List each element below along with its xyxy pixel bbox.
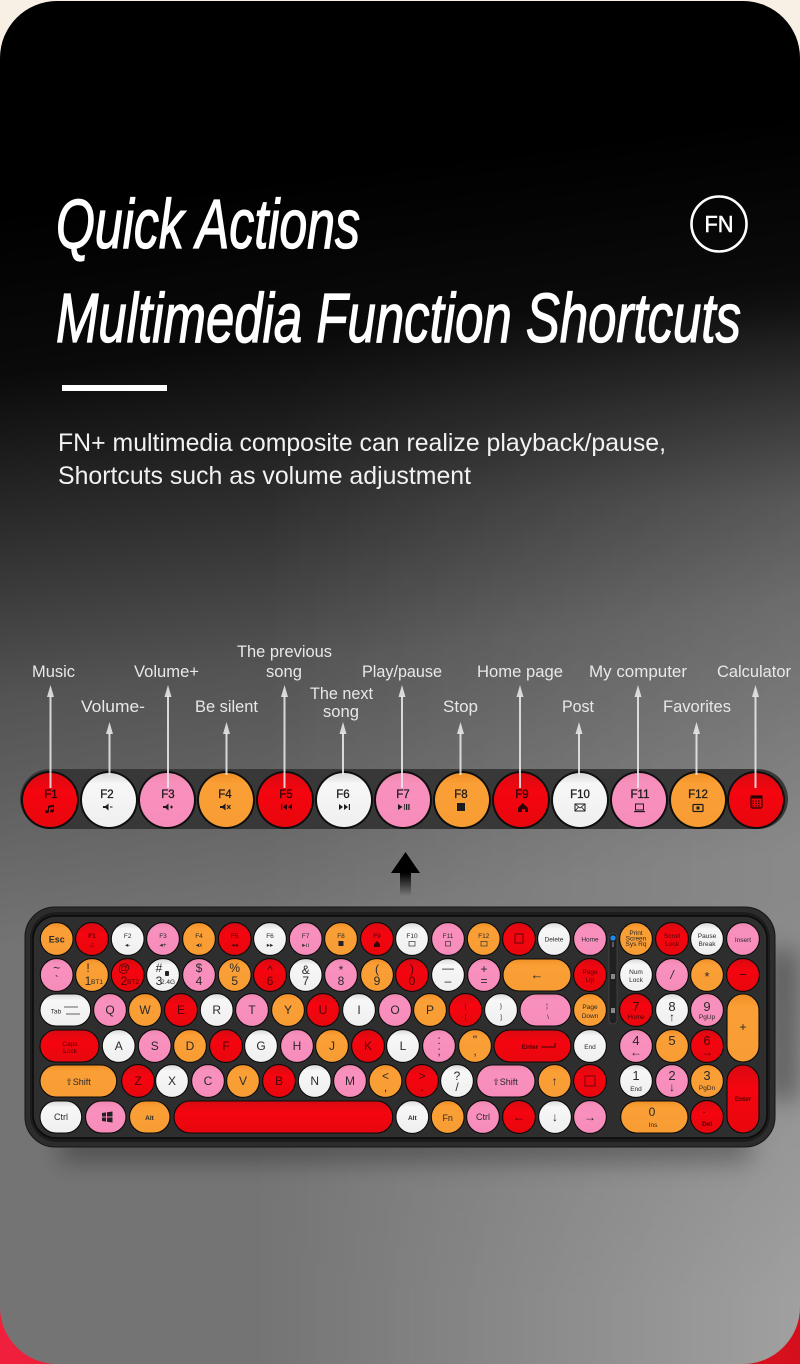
arrow: Volume+ (164, 685, 172, 788)
keyboard row 1 (40, 923, 759, 955)
key F2: F2 (100, 789, 114, 801)
keyboard row 6: 0 (649, 1105, 656, 1119)
panel: function key row (20, 769, 788, 829)
keyboard row 6: Del (702, 1121, 712, 1128)
keyboard row 3: Home (627, 1014, 645, 1021)
arrow: Volume- (106, 722, 113, 775)
keyboard row 5: ⇧Shift (492, 1077, 518, 1087)
keyboard row 3: { (464, 1003, 467, 1010)
arrow: Home page (516, 685, 524, 788)
keyboard frame (25, 907, 775, 1147)
keyboard row 4: 5 (668, 1033, 676, 1048)
keyboard row 5: Enter (735, 1096, 752, 1103)
arrows and labels (32, 642, 791, 788)
keyboard row 5: B (275, 1074, 283, 1088)
keyboard row 2: $ (196, 961, 203, 975)
keyboard row 1: Scroll (664, 933, 681, 940)
keyboard row 2: 2.4G (161, 979, 175, 986)
keyboard row 4: L (400, 1039, 407, 1053)
keyboard row 6: Ctrl (476, 1112, 490, 1122)
arrow: Be silent (223, 722, 230, 775)
keyboard row 1: F5 (231, 933, 239, 940)
keyboard row 6: Ins (649, 1122, 658, 1129)
keyboard row 6 (40, 1101, 723, 1133)
keyboard row 3: O (390, 1003, 400, 1017)
keyboard row 5: X (168, 1074, 176, 1088)
label: Music: Music (32, 662, 75, 681)
keyboard row 2: 1 (85, 974, 92, 988)
description text: FN+ multimedia composite can realize playback/pause, (58, 429, 666, 457)
key F6 (315, 771, 373, 829)
keyboard row 4: 6 (703, 1033, 711, 1048)
keyboard row 3: Page (582, 1004, 598, 1011)
key F9: F9 (515, 789, 529, 801)
keyboard row 1: F2 (124, 933, 132, 940)
keyboard row 5: ? (454, 1069, 461, 1083)
keyboard row 2: 9 (374, 974, 381, 988)
keyboard row 1: F8 (337, 933, 345, 940)
title (56, 185, 741, 357)
key F12: F12 (688, 789, 708, 801)
keyboard row 2: * (704, 969, 710, 984)
keyboard row 4: → (701, 1045, 713, 1059)
keyboard row 1: F11 (443, 933, 454, 940)
keyboard row 2: & (302, 963, 310, 977)
key F11: F11 (631, 789, 649, 801)
keyboard row 4: A (115, 1039, 123, 1053)
keyboard row 6: . (702, 1102, 706, 1116)
label: Play/pause: Play/pause (362, 662, 442, 681)
key F4: F4 (218, 789, 232, 801)
keyboard row 4: D (186, 1039, 195, 1053)
keyboard row 3: I (357, 1003, 361, 1017)
keyboard row 3: + (739, 1020, 747, 1034)
arrow: Calculator (752, 685, 759, 788)
keyboard row 6: Fn (442, 1113, 453, 1123)
keyboard row 5: V (239, 1074, 247, 1088)
description text: Shortcuts such as volume adjustment (58, 462, 471, 490)
keyboard row 3: 7 (632, 999, 640, 1014)
keyboard row 5: 2 (668, 1068, 676, 1083)
arrow: Play/pause (398, 685, 406, 788)
keyboard row 3: ↑ (669, 1010, 675, 1024)
keyboard row 4: End (584, 1044, 596, 1051)
keyboard row 1: ◂◂ (231, 942, 239, 949)
keyboard row 4: ; (437, 1044, 441, 1058)
keyboard row 3: W (139, 1003, 151, 1017)
key F1: F1 (44, 789, 58, 801)
keyboard row 3: ] (500, 1014, 502, 1021)
description text (58, 429, 666, 490)
keyboard row 2: # (156, 961, 163, 975)
keyboard row 6: Alt (145, 1115, 155, 1122)
keyboard row 1: Delete (545, 936, 564, 944)
keyboard row 3: P (426, 1003, 434, 1017)
keyboard row 1: Esc (49, 934, 65, 944)
title: Quick Actions (56, 185, 360, 263)
keyboard row 4: 4 (632, 1033, 640, 1048)
label: Favorites: Favorites (663, 697, 731, 716)
keyboard row 2: 3 (156, 974, 163, 988)
label: Volume-: Volume- (81, 697, 145, 716)
keyboard row 6: Alt (408, 1115, 417, 1122)
keyboard row 3: Q (105, 1003, 115, 1017)
keyboard row 5: > (418, 1069, 426, 1083)
keyboard row 3: E (177, 1003, 185, 1017)
keyboard row 2: 2 (121, 974, 128, 988)
arrow: Favorites (693, 722, 700, 775)
indicator lights (609, 933, 617, 1024)
keyboard row 5: PgDn (699, 1085, 716, 1092)
keyboard row 5: / (455, 1080, 459, 1094)
keyboard row 4: ← (630, 1045, 642, 1059)
arrow: Post (576, 722, 582, 775)
key F2 (80, 771, 138, 829)
keyboard row 1: Sys Rq (626, 941, 647, 948)
label: Post: Post (562, 697, 594, 716)
keyboard row 2: 6 (267, 974, 274, 988)
key F6: F6 (336, 789, 350, 801)
key F9 (492, 771, 550, 829)
key F4 (197, 771, 255, 829)
keyboard row 2: ) (410, 962, 414, 976)
keyboard row 4 (40, 1030, 723, 1062)
label: The next song: The next (310, 684, 373, 703)
keyboard row 5: M (345, 1074, 355, 1088)
key F10 (551, 771, 609, 829)
keyboard row 4: S (151, 1039, 159, 1053)
keyboard row 5: ↑ (552, 1074, 558, 1088)
label: Be silent: Be silent (195, 697, 258, 716)
keyboard row 3: [ (465, 1014, 467, 1021)
keyboard row 2: Up (586, 977, 595, 984)
key F5: F5 (279, 789, 293, 801)
keyboard row 1: F4 (195, 933, 203, 940)
keyboard row 1: Insert (735, 937, 751, 944)
keyboard row 5: , (384, 1080, 387, 1094)
keyboard row 2: @ (118, 961, 130, 975)
icon: FN badge: FN (704, 211, 734, 237)
title underline (62, 385, 167, 391)
keyboard row 2: 7 (302, 974, 309, 988)
keyboard row 1: ▸▸ (267, 942, 274, 949)
keyboard row 1: F1 (88, 933, 96, 940)
keyboard row 4: F (222, 1039, 230, 1053)
keyboard row 4: , (473, 1044, 477, 1058)
arrow: next song (340, 722, 346, 775)
keyboard row 3: Down (582, 1013, 599, 1020)
key F5 (256, 771, 314, 829)
keyboard row 2: BT1 (91, 979, 103, 986)
keyboard row 1: ◂+ (159, 942, 167, 949)
keyboard row 5: End (630, 1086, 642, 1093)
keyboard row 1: ◂- (125, 942, 130, 949)
arrow: My computer (634, 685, 642, 788)
keyboard row 1: ▸ıı (302, 942, 309, 949)
keyboard row 3: ¦ (546, 1003, 548, 1010)
keyboard row 3: Tab (51, 1008, 62, 1016)
keyboard row 4: H (293, 1039, 301, 1053)
keyboard row 2: − (739, 967, 747, 982)
keyboard row 2: 0 (409, 974, 416, 988)
keyboard row 4: : (437, 1033, 441, 1047)
keyboard row 4: J (329, 1039, 335, 1053)
keyboard row 1: Screen (626, 936, 647, 942)
keyboard row 2: ^ (267, 963, 273, 977)
icon: FN badge (692, 196, 746, 252)
keyboard row 4: G (256, 1039, 266, 1053)
keyboard row 1: F10 (406, 933, 418, 940)
keyboard row 5: N (310, 1074, 319, 1088)
keyboard row 2: ` (55, 973, 59, 987)
keyboard row 5: 3 (703, 1068, 711, 1083)
keyboard shadow (60, 950, 798, 1162)
keyboard row 2: / (669, 968, 675, 982)
keyboard row 5: ↓ (669, 1080, 675, 1094)
keyboard row 2: Page (582, 969, 598, 976)
keyboard row 1: Break (699, 941, 716, 948)
keyboard row 1: Home (581, 936, 599, 944)
keyboard row 5 (40, 1065, 759, 1133)
keyboard row 2: = (480, 974, 488, 988)
keyboard row 5: ⇧Shift (65, 1077, 91, 1087)
keyboard row 3 (40, 994, 759, 1062)
keyboard row 6: Ctrl (54, 1112, 68, 1122)
key F8 (433, 771, 491, 829)
keyboard row 5: 1 (632, 1068, 640, 1083)
arrow: Stop (457, 722, 464, 775)
keyboard row 2: ~ (53, 961, 60, 975)
keyboard row 2: — (442, 961, 454, 975)
keyboard row 1: F7 (302, 933, 310, 940)
label: Volume+: Volume+ (134, 662, 199, 681)
arrow: previous song (281, 685, 288, 788)
keyboard row 2: – (445, 974, 452, 988)
label: Stop: Stop (443, 697, 478, 716)
label: The previous song: song (266, 662, 302, 681)
key F7 (374, 771, 432, 829)
keyboard row 1: F3 (159, 933, 167, 940)
keyboard row 6: ← (513, 1110, 525, 1124)
arrow: up arrow pointing to function row (391, 852, 420, 896)
key F11 (610, 771, 668, 829)
keyboard row 2: * (339, 963, 344, 977)
keyboard row 5: . (420, 1080, 424, 1094)
keyboard (25, 907, 775, 1147)
arrow: Music (47, 685, 54, 788)
keyboard row 2: % (229, 961, 240, 975)
key F12 (669, 771, 727, 829)
keyboard row 4: Enter (522, 1044, 539, 1051)
label: The previous song: The previous (237, 642, 332, 661)
keyboard row 4: K (364, 1039, 372, 1053)
keyboard row 1: F12 (478, 933, 490, 940)
keyboard row 5: < (382, 1069, 389, 1083)
keyboard row 2: BT2 (127, 979, 139, 986)
keyboard row 1: Lock (665, 941, 680, 948)
keyboard row 2: ( (375, 962, 379, 976)
keyboard row 3: 9 (703, 999, 711, 1014)
keyboard row 1: Print (629, 930, 643, 937)
keyboard row 3: 8 (668, 999, 676, 1014)
keyboard row 4: Lock (63, 1048, 78, 1055)
label: The next song: song (323, 702, 359, 721)
label: Home page: Home page (477, 662, 563, 681)
keyboard row 4: " (473, 1033, 477, 1047)
keyboard row 1: F9 (373, 933, 381, 940)
keyboard row 3: R (212, 1003, 221, 1017)
label: My computer: My computer (589, 662, 687, 681)
keyboard row 1: F6 (266, 933, 274, 940)
keyboard row 3: U (319, 1003, 327, 1017)
keyboard row 2: 8 (338, 974, 345, 988)
keyboard row 2 (40, 959, 759, 991)
label: Calculator: Calculator (717, 662, 791, 681)
keyboard row 3: \ (547, 1014, 549, 1021)
key F3 (138, 771, 196, 829)
keyboard row 1: Pause (698, 933, 717, 940)
label: The next song (310, 684, 373, 721)
keyboard row 3: PgUp (699, 1014, 716, 1021)
keyboard row 6: → (584, 1110, 596, 1124)
keyboard row 4: Caps (62, 1041, 78, 1048)
key F10: F10 (570, 789, 590, 801)
keyboard row 2: Lock (629, 977, 644, 984)
key F7: F7 (396, 789, 410, 801)
keyboard row 1: ♫ (90, 942, 94, 949)
label: The previous song (237, 642, 332, 681)
key calculator (727, 771, 785, 829)
keyboard row 5: Z (134, 1074, 142, 1088)
keyboard row 1: ◂x (196, 942, 203, 949)
keyboard row 2: ← (530, 967, 544, 982)
keyboard row 3: } (500, 1003, 503, 1010)
keyboard row 2: ! (86, 961, 90, 975)
keyboard row 5: C (204, 1074, 213, 1088)
keyboard row 2: + (480, 962, 488, 976)
keyboard row 2: 5 (231, 974, 238, 988)
key F1 (21, 771, 79, 829)
keyboard row 2: 4 (196, 974, 203, 988)
keyboard row 2: Num (629, 969, 643, 976)
keyboard row 6: ↓ (552, 1110, 558, 1124)
keyboard row 3: T (248, 1003, 256, 1017)
key F8: F8 (454, 789, 468, 801)
key F3: F3 (161, 789, 175, 801)
keyboard row 3: Y (284, 1003, 292, 1017)
